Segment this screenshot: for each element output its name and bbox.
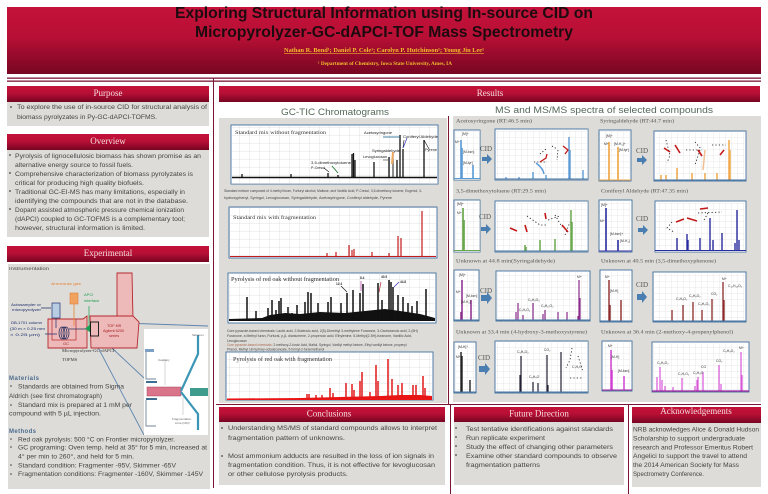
caption: red oak: Core pyrazole-based chemicals: 2-methoxy-2-furoic Acid, Maltol, Syringol, Vanillyl methyl ketone, Ethyl vanillyl ketone, propenyl [227,343,407,347]
caption: standard mix: hydroxyphenyl, Syringol, Levoglucosan, Syringaldehyde, Acetosyringone, Coniferyl aldehyde, Pyrene [224,196,392,200]
label: instrumentation: Instrumentation [9,266,50,271]
methods: Methods [9,429,37,435]
acknowledgements text: the 2014 American Society for Mass [633,462,740,469]
panel: experimental [7,246,210,489]
spectrum set: coniferyl aldehyde: CID [636,215,648,223]
caption: red oak: Levoglucosan [227,339,247,343]
spectrum set: acetosyringone: [M-bzn] [463,150,474,154]
spectrum set: unknown at 33.4 min: CID [478,354,490,362]
overview text [9,153,201,232]
instrument diagram: Agilent 6200 [103,329,124,333]
spectrum set: unknown at 36.4 min: C₈H₉O₂ [657,361,669,365]
spectrum set: unknown at 44.8 min: [M-bzn] [466,294,477,298]
affiliation: ¹ Department of Chemistry, Iowa State University, Ames, IA [318,61,452,67]
caption: standard mix [224,189,422,200]
purpose text: To explore the use of in-source CID for structural analysis of [17,104,207,111]
conclusions text [221,425,437,478]
future direction list [455,426,617,469]
spectrum set: coniferyl aldehyde: M+ [600,219,605,223]
overview text: identifying the compounds that are not in the database. [15,198,188,205]
methods: Red oak pyrolysis: 500 °C on Frontier micropyrolyzer. [18,436,175,444]
title [175,5,593,41]
instrument diagram: interface [84,298,100,303]
heading: purpose: Purpose [94,88,123,98]
spectrum set: unknown at 44.8 min: M+ [456,290,461,294]
instrument diagram: TOF MS [107,324,122,328]
panel: future direction [454,407,624,485]
spectrum set: unknown at 40.5 min: C₉H₉O₂ [698,302,710,306]
acknowledgements text: Angelici to support the travel to attend [633,453,747,460]
icon: GC column coil [59,327,88,339]
panel: acknowledgements [632,406,761,487]
future direction list: Test tentative identifications against standards [466,426,614,433]
spectrum set: coniferyl aldehyde: [M-H₂] [620,239,630,243]
instrument diagram: series [109,334,119,338]
panel: purpose [7,86,209,126]
spectrum set: coniferyl aldehyde [599,188,746,252]
diagram caption [62,348,116,362]
spectrum set: coniferyl aldehyde: Coniferyl Aldehyde (RT:47.35 min) [601,188,688,194]
spectrum set: 3,5-dimethoxytoluene: M+ [457,211,462,215]
diagram caption: TOFMS [62,357,78,362]
chart: pyrolysis of red oak without fragmentation: 12.4 [336,282,342,286]
chart: standard mix with fragmentation [229,207,437,258]
spectrum set: unknown at 44.8 min: M+ [577,275,582,279]
conclusions text: Understanding MS/MS of standard compounds allows to interpret [228,425,437,432]
methods: GC programing: Oven temp. held at 35° for 5 min, increased at [18,444,207,452]
diagram caption: Micropyrolyzer-GC-dAPCI- [62,348,116,353]
spectrum set: unknown at 44.8 min: C₉H₁₁O₂ [541,304,554,308]
instrument diagram: Autosampler or [11,303,42,307]
spectrum set: unknown at 44.8 min: [M-H₂] [461,300,471,304]
materials: Materials [9,376,40,382]
inset: ion source schematic: Skimmer [192,333,204,337]
spectrum set: unknown at 44.8 min: C₈H₉O₂ [528,298,540,302]
title: Micropyrolyzer-GC-dAPCI-TOF Mass Spectrometry [195,24,573,41]
spectrum set: unknown at 40.5 min: [M-H] [610,289,618,293]
instrument diagram: × 0.25 μm) [10,333,40,337]
chart: standard mix without fragmentation: Coniferyl Aldehyde [403,135,438,139]
spectrum set: syringaldehyde [599,118,746,181]
spectrum set: unknown at 33.4 min: Unknown at 33.4 min (4-hydroxy-3-methoxystyrene) [456,328,587,336]
spectrum set: acetosyringone: M+ [455,140,460,144]
chart: standard mix without fragmentation: Syringaldehyde [372,149,400,153]
title: Exploring Structural Information using In-source CID on [175,5,593,22]
methods [9,429,207,478]
spectrum set: unknown at 40.5 min: Unknown at 40.5 min (3,5-dimethoxyphenone) [601,258,716,264]
materials: Aldrich (see first chromatograph) [9,393,102,400]
spectrum set: acetosyringone: [M]+ [462,132,469,136]
overview text: (dAPCI) coupled to GC-TOFMS is a complementary tool; [15,216,185,223]
spectrum set: unknown at 36.4 min: C₇H₇O₂ [678,372,690,376]
spectrum set: syringaldehyde: M+ [604,142,609,146]
spectrum set: unknown at 33.4 min: [M-H]⁺ [458,345,468,349]
chart: pyrolysis of red oak with fragmentation: Pyrolysis of red oak with fragmentation [233,356,332,363]
future direction list: Study the effect of changing other parameters [466,444,614,451]
spectrum set: unknown at 44.8 min: CID [480,287,492,295]
overview text: Traditional GC-EI-MS has many limitations, especially in [15,189,185,196]
spectrum set: acetosyringone [454,118,588,180]
spectrum set: unknown at 40.5 min: M+ [605,275,610,279]
spectrum set: unknown at 33.4 min [454,328,588,393]
chart: pyrolysis of red oak without fragmentation [228,273,436,323]
future direction list: fragmentation patterns [466,462,541,469]
materials: Standard mix is prepared at 1 mM per [18,402,133,409]
spectrum set: coniferyl aldehyde: [M-bzn]+ [610,232,623,236]
caption: standard mix: Standard mixture composed of 4-methyl furan, Furfuryl alcohol, Maltose, and Vanillic Acid, P-Cresol, 3,5-dimethoxy toluene, Eugenol, 3- [224,189,422,193]
spectrum set: unknown at 36.4 min: C₉H₉O₂ [723,349,735,353]
instrument diagram: Ammonia gas [51,281,81,286]
chart: standard mix without fragmentation: Levoglucosan [363,155,387,159]
acknowledgements text [633,426,759,478]
spectrum set: 3,5-dimethoxytoluene [454,188,588,252]
conclusions text: Most ammonium adducts are resulted in the loss of ion signals in [228,453,434,460]
chart: standard mix without fragmentation [231,125,438,184]
heading: overview: Overview [90,136,126,146]
overview text: Dopant assisted atmospheric pressure chemical ionization [15,207,184,214]
overview text: critical for producing high quality biofuels. [15,180,144,187]
instrument diagram: (30 m × 0.25 mm [10,327,45,331]
spectrum set: acetosyringone: Acetosyringone (RT:46.5 min) [456,118,532,124]
spectrum set: unknown at 36.4 min: C₉H₉O [693,371,704,375]
spectrum set: unknown at 36.4 min: M+ [608,344,613,348]
spectrum set: unknown at 40.5 min: C₁₀H₁₃O₃ [728,284,743,288]
spectrum set: unknown at 40.5 min: CID [636,281,648,289]
caption: red oak: Phenol, Methyl 18-hydroxy-octadecanoate, 5-formyl-2-furanmethanol [227,348,325,352]
spectrum set: unknown at 36.4 min: Unknown at 36.4 min (2-methoxy-4-propenylphenol) [601,328,733,336]
materials [9,376,133,418]
chart: pyrolysis of red oak without fragmentation: 40.5 [381,275,387,279]
spectrum set: unknown at 33.4 min: M+ [456,355,461,359]
conclusions text: fragmentation condition. Thus, it is not effective for levoglucosan [228,462,435,469]
spectrum set: unknown at 44.8 min: [M]+ [459,273,466,277]
instrument diagram: APCI [84,292,93,297]
future direction list: Examine other standard compounds to observe [466,453,617,460]
panel: conclusions [219,407,445,485]
instrument diagram [10,273,208,435]
purpose text: biomass pyrolyzates in Py-GC-dAPCI-TOFMS. [17,114,157,121]
conclusions text: or other cellulose pyrolysis products. [228,471,348,478]
caption: red oak: Core pyrazole-based chemicals: Lactic acid, 2-Butenoic acid, 2(5)-Dimethyl 3-methylene Furanone, 3-Oxobutanoic acid, 2-(5H) [227,329,418,333]
acknowledgements text: Scholarship to support undergraduate [633,436,745,442]
panel: results [219,86,761,403]
spectrum set: acetosyringone: CID [480,145,492,153]
spectrum set: unknown at 36.4 min: CO₂ [716,359,723,363]
chart: standard mix without fragmentation: P-Cresol [311,166,325,170]
spectrum set: coniferyl aldehyde: [M]+ [601,203,608,207]
instrument diagram: micropyrolyzer [12,308,42,312]
spectrum set: unknown at 33.4 min: C₈H₉O [529,375,540,379]
spectrum set: unknown at 33.4 min: CO₂ [544,348,551,352]
spectrum set: unknown at 36.4 min: CO [701,365,706,369]
panel: GC-TIC chromatograms [219,106,447,403]
heading: spectra: MS and MS/MS spectra of selected compounds [495,104,713,115]
methods: Fragmentation conditions: Fragmenter -160V, Skimmer -145V [18,471,204,478]
spectrum set: unknown at 36.4 min: [M-bzn] [618,369,629,373]
spectrum set: unknown at 36.4 min [601,328,749,392]
overview text: alternative energy source to fossil fuels. [15,162,133,169]
heading: acknowledgements: Acknowledgements [660,406,732,416]
spectrum set: unknown at 40.5 min: CO₂ [711,292,718,296]
future direction list: Run replicate experiment [466,435,545,442]
spectrum set: unknown at 44.8 min: C₇H₇O₂ [519,308,531,312]
materials: Standards are obtained from Sigma [18,384,124,390]
spectrum set: 3,5-dimethoxytoluene: 3,5-dimethoxytoluene (RT:29.5 min) [456,188,546,194]
panel: overview [7,134,209,237]
spectrum set: syringaldehyde: Syringaldehyde (RT:44.7 min) [600,118,674,124]
panel: MS and MS/MS spectra [453,104,761,402]
spectrum set: syringaldehyde: [M]+ [606,134,613,138]
spectrum set: unknown at 40.5 min: C₈H₉O₂ [689,294,701,298]
instrument diagram: DB-1701 column [11,321,42,325]
chart: pyrolysis of red oak with fragmentation [226,352,433,400]
chart: standard mix without fragmentation: Acetosyringone [364,131,392,135]
spectrum set: unknown at 36.4 min: M+ [739,346,744,350]
spectrum set: unknown at 40.5 min [600,258,746,322]
spectrum set: syringaldehyde: [M-tyr] [619,148,629,152]
heading: conclusions: Conclusions [307,409,352,419]
title banner [7,5,761,74]
overview text: Comprehensive characterization of biomass pyrolyzates is [15,171,194,178]
heading: results: Results [477,88,504,98]
acknowledgements text: NRB acknowledges Alice & Donald Hudson [633,426,759,434]
spectrum set: unknown at 40.5 min: M+ [722,277,727,281]
instrument diagram: GC [63,341,69,346]
spectrum set: unknown at 33.4 min: C₇H₇O [572,365,582,369]
spectrum set: unknown at 36.4 min: [M-H] [611,355,619,359]
chart: standard mix without fragmentation: Standard mix without fragmentation [235,129,326,136]
caption: red oak [227,329,418,352]
acknowledgements text: research and Professor Emeritus Robert [633,444,753,452]
inset: ion source schematic: zone (CID) [175,421,190,425]
chart: standard mix with fragmentation: Standard mix with fragmentation [233,214,316,221]
heading: experimental: Experimental [84,248,133,258]
authors: Nathan R. Bond¹; Daniel P. Cole¹; Carolyn P. Hutchinson¹; Young Jin Lee¹ [284,48,484,54]
spectrum set: syringaldehyde: [M-H₂]+ [614,142,626,146]
inset: ion source schematic [144,329,208,435]
conclusions text: fragmentation pattern of unknowns. [228,435,345,442]
spectrum set: unknown at 44.8 min: Unknown at 44.8 min(Syringaldehyde) [456,258,555,264]
spectrum set: 3,5-dimethoxytoluene: CID [479,213,491,221]
spectrum set: syringaldehyde: CID [636,147,648,155]
materials: compound with 5 µL injection. [9,410,101,418]
spectrum set: 3,5-dimethoxytoluene: [M]+ [457,202,464,206]
methods: Standard condition: Fragmenter -95V, Skimmer -65V [18,462,177,470]
chart: pyrolysis of red oak without fragmentation: 8.4 [360,276,365,280]
heading: future direction: Future Direction [509,409,569,419]
chart: pyrolysis of red oak without fragmentation: 44.8 [400,280,406,284]
spectrum set: acetosyringone: [M-tyr] [463,161,473,165]
spectrum set: unknown at 33.4 min: C₉H₉O₂ [517,350,529,354]
caption: red oak: Furanone, a Methyl furan, Furfural, p,β- dianiumene, 2-propenoic acid, Ethylenine, 5-Methyl(2-5H)-furanone, Vanillic Acid, [227,334,412,338]
spectrum set: unknown at 40.5 min: C₇H₉O₂ [676,297,688,301]
spectrum set: unknown at 44.8 min [454,258,590,321]
inset: ion source schematic: Fragmentation [172,417,192,421]
inset: ion source schematic: Capillary [158,358,170,362]
chart: standard mix without fragmentation: 3,5-dimethoxytoluene [311,161,351,165]
methods: 4° per min to 260°, and held for 5 min. [18,452,134,460]
chart: pyrolysis of red oak without fragmentation: Pyrolysis of red oak without fragmentation [231,276,339,283]
purpose text [10,104,207,121]
overview text: Pyrolysis of lignocellulosic biomass has shown promise as an [15,153,201,160]
heading: GC-TIC chromatograms: GC-TIC Chromatograms [281,106,389,117]
chart: standard mix without fragmentation: Pyrene [425,148,437,152]
acknowledgements text: Spectrometry Conference. [633,471,704,478]
overview text: however, structural information is limited. [15,225,145,232]
